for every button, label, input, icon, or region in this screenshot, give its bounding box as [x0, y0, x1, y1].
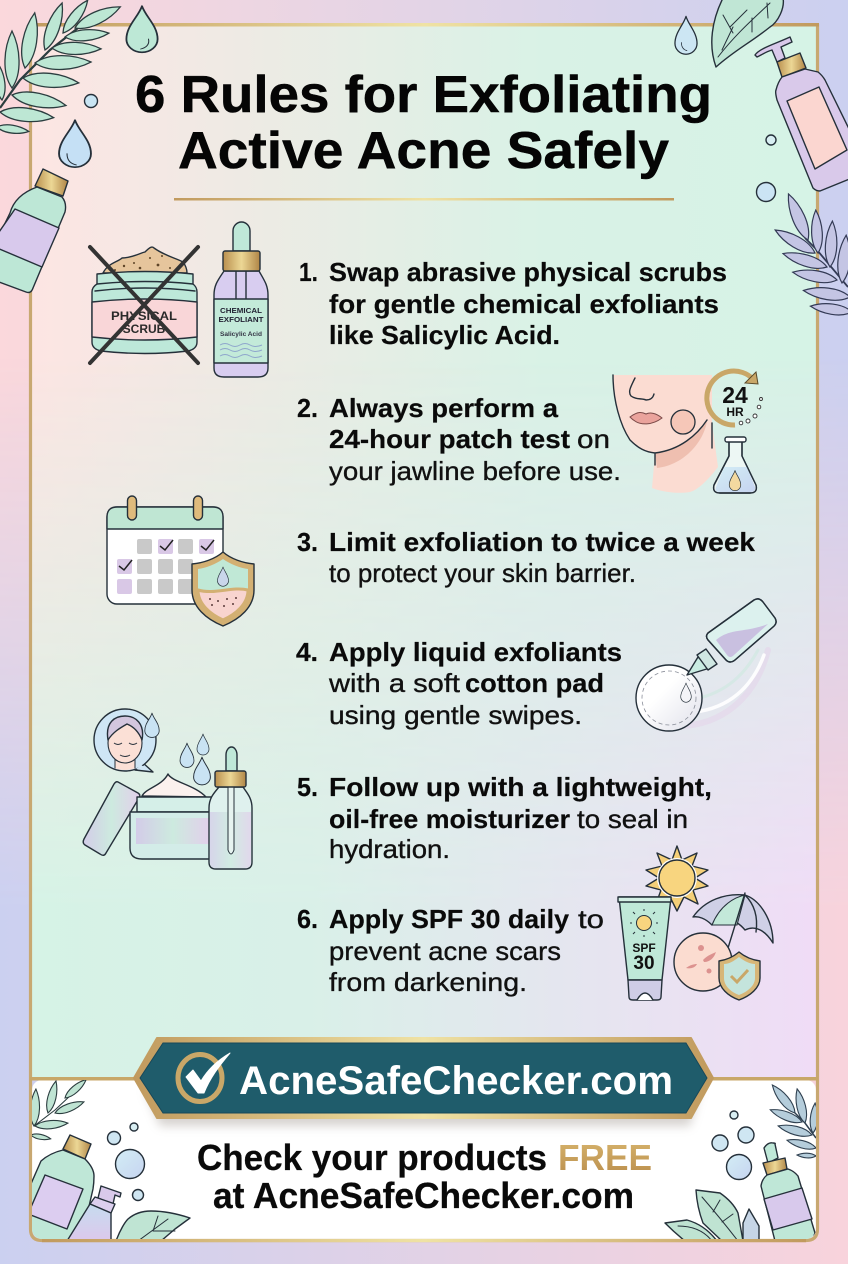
decoration: left tilted bottle: [0, 169, 68, 292]
icon: blue water drop: [59, 120, 91, 167]
panel: footer white area: [32, 1080, 816, 1239]
decoration: top-right large leaf: [712, 0, 783, 67]
rule 6 text: from darkening.: [329, 967, 527, 997]
decoration: top-left mint branch: [0, 0, 123, 135]
icon: cotton pad: [636, 665, 702, 731]
footer call to action: at AcneSafeChecker.com: [213, 1175, 634, 1216]
icon: 24 hour timer: HR: [726, 405, 744, 419]
rule 3 text: Limit exfoliation to twice a week: [329, 527, 756, 557]
rule 2 text: your jawline before use.: [329, 456, 621, 486]
icon: SPF 30 sunscreen tube: SPF: [632, 941, 656, 955]
title: [135, 66, 712, 180]
rule 3 text: to protect your skin barrier.: [329, 558, 636, 588]
footer call to action: [197, 1137, 652, 1216]
rule 1 text: Swap abrasive physical scrubs: [329, 257, 727, 287]
icon: open cream jar: [83, 774, 212, 859]
icon: lab flask: [714, 437, 756, 493]
rule 3 text: [297, 527, 756, 588]
icon: skin barrier shield: [192, 552, 254, 626]
decoration: footer left branch: [32, 1080, 86, 1140]
decoration: top-right pump bottle: [755, 37, 848, 191]
rule 2 text: on: [577, 424, 610, 454]
icon: right bubbles: [756, 135, 776, 202]
rule 5 text: 5.: [297, 772, 318, 802]
banner shadow: [145, 1090, 700, 1126]
rule 5 text: oil-free moisturizer: [329, 804, 570, 834]
icon: chemical exfoliant serum bottle: [214, 222, 268, 377]
title divider: [174, 198, 674, 200]
icon: calendar: [107, 496, 223, 604]
icon: sun: [646, 846, 708, 911]
icon: crossed out physical scrub jar: [90, 247, 198, 363]
icon: skin with acne marks: [674, 933, 732, 991]
icon: chemical exfoliant serum bottle: Salicylic Acid: [220, 331, 262, 338]
icon: moisture drops: [145, 713, 210, 785]
decoration: right lavender branch: [772, 192, 848, 317]
rule 6 text: Apply SPF 30 daily: [329, 904, 570, 934]
icon: face with jawline patch test: [613, 375, 718, 493]
icon: check shield: [719, 952, 760, 1000]
rule 5 text: to seal in: [577, 804, 688, 834]
decoration: footer left bottle and pump: [28, 1135, 190, 1241]
icon: SPF 30 sunscreen tube: [618, 897, 671, 1000]
rule 4 text: [296, 637, 622, 730]
panel: main content background: [30, 25, 818, 1080]
icon: dropper bottle: [687, 599, 776, 675]
rule 6 text: [297, 904, 604, 997]
icon: 24 hour timer: [707, 371, 762, 425]
rule 6 text: to: [578, 904, 604, 934]
icon: top-right blue drop: [675, 16, 697, 54]
footer call to action: Check your products: [197, 1137, 547, 1178]
icon: liquid swirl: [680, 650, 768, 726]
rule 2 text: Always perform a: [329, 393, 559, 423]
rule 1 text: [299, 257, 727, 350]
icon: crossed out physical scrub jar: PHYSICAL: [111, 309, 177, 323]
rule 1 text: like Salicylic Acid.: [329, 320, 560, 350]
icon: 24 hour timer: 24: [722, 382, 748, 408]
rule 2 text: 2.: [297, 393, 318, 423]
icon: chemical exfoliant serum bottle: CHEMICAL: [220, 306, 262, 315]
icon: umbrella: [693, 893, 773, 948]
rule 5 text: hydration.: [329, 834, 450, 864]
title: 6 Rules for Exfoliating: [135, 66, 712, 124]
banner: AcneSafeChecker.com: [134, 1038, 713, 1118]
icon: SPF 30 sunscreen tube: 30: [633, 953, 655, 974]
rule 6 text: 6.: [297, 904, 318, 934]
icon: face speech bubble: [94, 709, 156, 775]
rule 4 text: Apply liquid exfoliants: [329, 637, 622, 667]
rule 4 text: using gentle swipes.: [329, 700, 582, 730]
icon: chemical exfoliant serum bottle: EXFOLIANT: [218, 315, 264, 324]
decoration: footer right bubbles: [712, 1111, 754, 1180]
rule 4 text: cotton pad: [465, 668, 604, 698]
rule 4 text: 4.: [296, 637, 318, 667]
banner: AcneSafeChecker.com: AcneSafeChecker.com: [239, 1059, 673, 1103]
title: Active Acne Safely: [178, 122, 669, 180]
icon: crossed out physical scrub jar: SCRUB: [123, 322, 166, 336]
decoration: footer left bubbles: [108, 1123, 144, 1200]
rule 5 text: [297, 772, 712, 864]
rule 6 text: prevent acne scars: [329, 936, 561, 966]
rule 2 text: [297, 393, 621, 486]
footer call to action: FREE: [558, 1137, 652, 1178]
rule 4 text: with a soft: [328, 668, 461, 698]
icon: small bubble left: [84, 94, 98, 108]
icon: clear dropper bottle: [209, 747, 252, 869]
rule 2 text: 24-hour patch test: [329, 424, 570, 454]
rule 3 text: 3.: [297, 527, 318, 557]
rule 1 text: 1.: [299, 257, 318, 287]
decoration: footer right bottle and leaves: [665, 1143, 815, 1241]
decoration: footer right branch: [769, 1082, 819, 1158]
icon: mint water drop: [126, 6, 158, 52]
rule 1 text: for gentle chemical exfoliants: [329, 289, 719, 319]
rule 5 text: Follow up with a lightweight,: [329, 772, 712, 802]
icon: gold check circle: [178, 1053, 230, 1102]
